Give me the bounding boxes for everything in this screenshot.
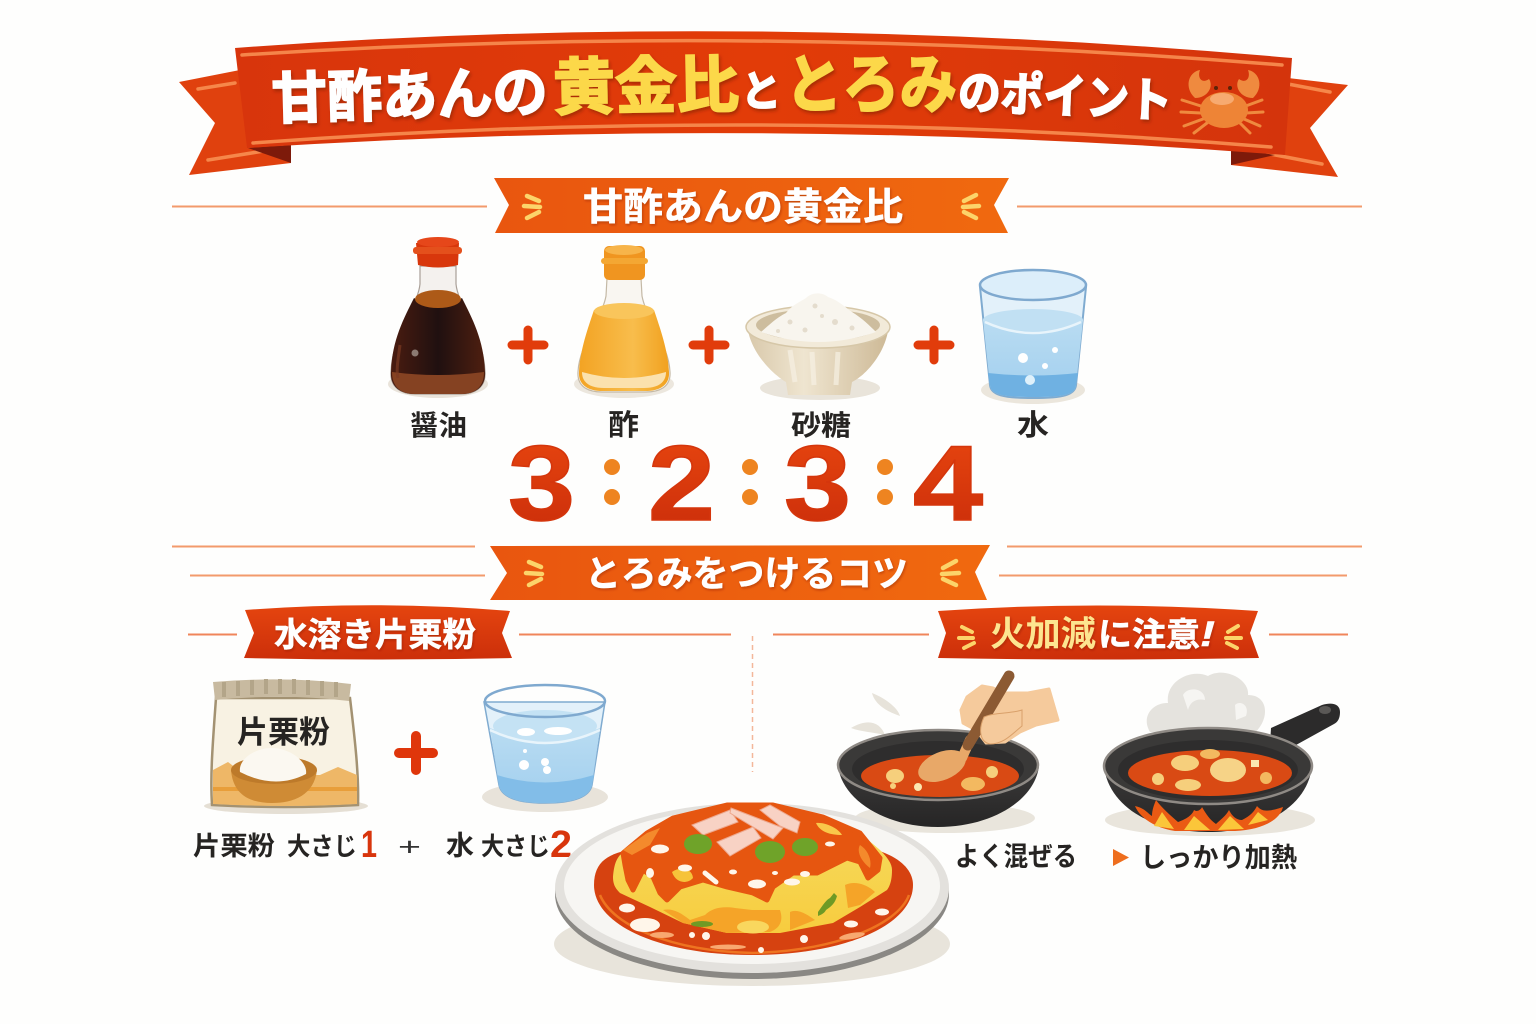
starch and water amounts: 2 xyxy=(550,824,572,866)
banner right tail xyxy=(1231,78,1348,177)
icon: starch bag: 片栗粉 xyxy=(237,715,330,750)
hand xyxy=(961,686,1058,743)
icon: crab xyxy=(1181,70,1263,133)
icon: pan on flame xyxy=(1104,673,1340,836)
ingredient labels: 酢 xyxy=(608,409,639,442)
title text: のポイント xyxy=(957,65,1173,128)
icon: glass of water xyxy=(980,270,1086,404)
heading: thickening tips: とろみをつけるコツ xyxy=(585,553,908,594)
steam xyxy=(1147,673,1265,735)
ingredient labels: 水 xyxy=(1017,409,1049,442)
pan handle xyxy=(1270,704,1340,745)
title text xyxy=(271,49,1173,131)
plus 3 xyxy=(918,330,950,360)
banner main ribbon xyxy=(235,31,1292,155)
heading: thickening tips xyxy=(172,545,1362,600)
starch and water amounts: 大さじ xyxy=(287,833,357,861)
peas xyxy=(684,834,712,854)
icon: arrow marker xyxy=(1113,849,1129,866)
title text: と xyxy=(741,68,781,115)
starch and water amounts xyxy=(193,824,572,866)
plus 2 xyxy=(693,330,725,360)
omelet xyxy=(613,805,892,933)
heading: water-dissolved starch xyxy=(188,605,731,660)
sauce on omelet xyxy=(623,805,880,900)
fingers xyxy=(981,710,1022,744)
label: heat thoroughly: しっかり加熱 xyxy=(1140,843,1297,873)
plate xyxy=(555,809,949,979)
orange patches on egg xyxy=(663,883,875,933)
heading: heat control: 火加減 xyxy=(990,615,1096,654)
heading: heat control: ! xyxy=(1200,615,1215,654)
flames xyxy=(1135,800,1283,831)
heading: heat control: に注意 xyxy=(1098,616,1200,653)
ratio numbers: 2 xyxy=(648,423,715,543)
starch and water amounts: + xyxy=(398,833,421,861)
icon: omelet plate xyxy=(554,803,950,986)
title text: とろみ xyxy=(785,49,957,121)
title banner xyxy=(179,31,1348,177)
spoon handle xyxy=(968,676,1009,745)
plus 1 xyxy=(512,330,544,360)
heading: heat control xyxy=(773,606,1348,660)
heading: water-dissolved starch: 水溶き片栗粉 xyxy=(274,616,476,653)
icon: glass of water small xyxy=(482,685,608,812)
ingredient labels: 砂糖 xyxy=(791,410,851,441)
ratio numbers: 3 xyxy=(508,423,575,543)
starch and water amounts: 1 xyxy=(361,824,377,866)
title text: 黄金比 xyxy=(552,51,740,124)
plate shadow xyxy=(554,902,950,986)
starch and water amounts: 水 xyxy=(446,831,474,861)
icon: vinegar bottle xyxy=(574,245,674,398)
heading: golden ratio xyxy=(172,178,1362,233)
divider xyxy=(752,636,754,772)
spoon bowl xyxy=(914,744,970,788)
icon: starch bag xyxy=(204,679,368,814)
ratio numbers: 3 xyxy=(784,423,851,543)
banner left tail xyxy=(179,70,291,175)
label: stir well: よく混ぜる xyxy=(955,842,1077,872)
banner folds xyxy=(248,145,1275,165)
ingredient labels xyxy=(410,409,1049,442)
ingredient labels: 醤油 xyxy=(410,410,467,441)
crab sticks xyxy=(692,805,800,856)
plus: starch and water xyxy=(399,736,433,770)
starch and water amounts: 片栗粉 xyxy=(193,831,275,861)
icon: soy sauce bottle xyxy=(388,237,488,398)
sauce pool xyxy=(594,848,913,955)
icon: sugar bowl xyxy=(746,293,890,400)
icon: stirring pan xyxy=(838,676,1058,833)
ratio numbers xyxy=(508,423,983,543)
heading: golden ratio: 甘酢あんの黄金比 xyxy=(583,187,903,229)
title text: 甘酢あんの xyxy=(271,60,549,131)
ratio numbers: 4 xyxy=(913,423,983,543)
starch and water amounts: 大さじ xyxy=(481,833,550,861)
